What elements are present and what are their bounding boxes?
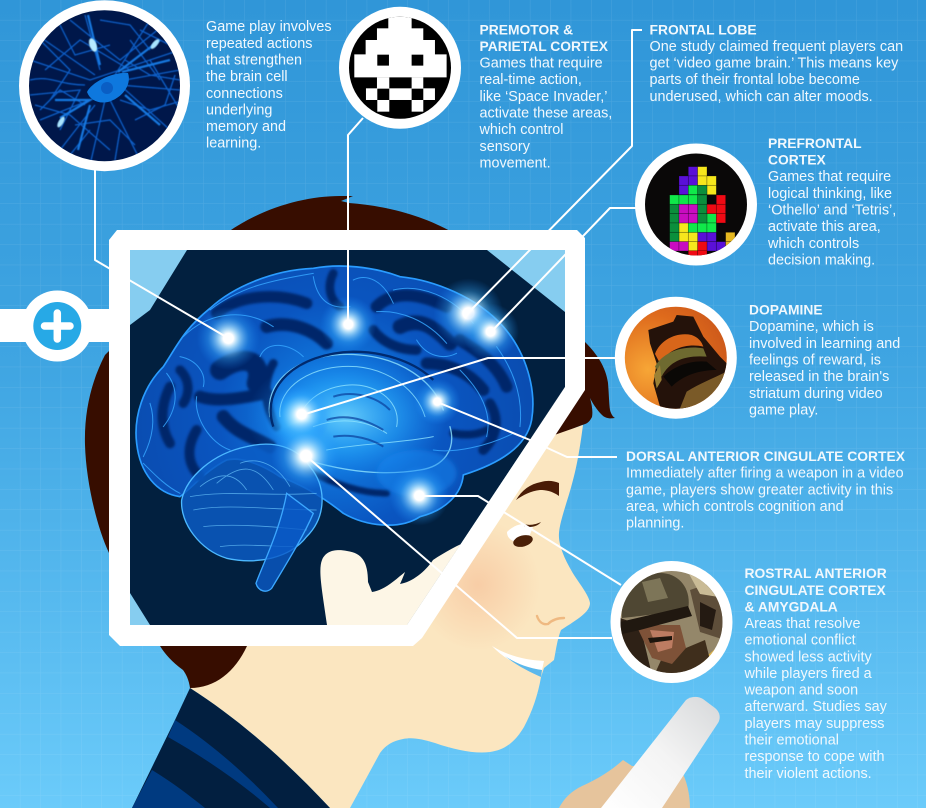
text: rostral anterior cingulate cortex and amygdala [744, 565, 891, 782]
heading: DORSAL ANTERIOR CINGULATE CORTEX [626, 448, 906, 464]
face and neck [190, 425, 590, 808]
text: memory and learning: memory and [206, 119, 286, 135]
body: like ‘Space Invader,’ [480, 89, 607, 105]
body: underused, which can alter moods. [650, 89, 873, 105]
body: which controls [767, 236, 859, 252]
brain [136, 266, 533, 591]
limbic glow [257, 367, 432, 467]
body: afterward. Studies say [744, 699, 888, 715]
heading: PREFRONTAL [768, 135, 862, 151]
hair [85, 196, 615, 688]
body: game play. [749, 402, 818, 418]
circle: neuron [19, 0, 190, 171]
heading: PARIETAL CORTEX [480, 38, 609, 54]
eye [507, 522, 541, 549]
dark striations in limbic system [327, 394, 390, 447]
heading: CORTEX [768, 152, 826, 168]
body: Dopamine, which is [749, 319, 874, 335]
body: real-time action, [480, 72, 582, 88]
mouth [492, 646, 544, 670]
heading: DOPAMINE [749, 302, 823, 318]
text: memory and learning: learning. [206, 136, 261, 152]
body: feelings of reward, is [749, 352, 881, 368]
body: striatum during video [749, 386, 883, 402]
text: memory and learning: the brain cell [206, 69, 288, 85]
body: emotional conflict [744, 632, 856, 648]
body: activate these areas, [480, 106, 612, 122]
window light background [130, 250, 566, 626]
dark sulci [162, 273, 507, 493]
limbic ridges [269, 354, 452, 473]
text: memory and learning: underlying [206, 102, 272, 118]
hand [559, 760, 690, 808]
text: memory and learning: connections [206, 86, 283, 102]
text: dopamine [749, 302, 904, 418]
game controller stick [601, 697, 720, 808]
shirt collar [132, 688, 330, 808]
circle: soldier [610, 561, 732, 683]
brain stem [256, 493, 313, 591]
body: area, which controls cognition and [626, 499, 844, 515]
heading: & AMYGDALA [744, 598, 838, 614]
text: dorsal anterior cingulate cortex [626, 448, 908, 532]
glow points [197, 278, 519, 526]
body: game, players show greater activity in this [626, 482, 893, 498]
body: Games that require [768, 169, 891, 185]
body: movement. [480, 156, 551, 172]
connector lines [95, 30, 642, 638]
text: memory and learning: repeated actions [206, 36, 312, 52]
circle: space invader [339, 7, 461, 129]
body: Areas that resolve [744, 616, 860, 632]
heading: ROSTRAL ANTERIOR [744, 565, 887, 581]
body: while players fired a [744, 666, 872, 682]
white frame [109, 230, 585, 646]
body: their violent actions. [744, 766, 872, 782]
ear and neck [320, 544, 460, 625]
brain window [130, 250, 566, 640]
text: premotor and parietal cortex [478, 22, 616, 172]
body: ‘Othello’ and ‘Tetris’, [768, 202, 896, 218]
nostril [537, 616, 564, 624]
body: showed less activity [744, 650, 872, 666]
body: released in the brain's [749, 369, 889, 385]
body: players may suppress [744, 716, 884, 732]
dark arc in limbic system [271, 352, 433, 427]
body: planning. [626, 516, 684, 532]
body: One study claimed frequent players can [650, 39, 903, 55]
circle: tetris [635, 144, 757, 266]
eyebrow [516, 481, 559, 500]
lower lobe highlight [377, 450, 457, 497]
body: get ‘video game brain.’ This means key [650, 56, 899, 72]
heading: CINGULATE CORTEX [744, 582, 887, 598]
body: decision making. [768, 252, 875, 268]
body: which control [478, 122, 563, 138]
body: response to cope with [744, 749, 884, 765]
body: Immediately after firing a weapon in a video [626, 466, 904, 482]
heading: PREMOTOR & [480, 22, 573, 38]
body: parts of their frontal lobe become [650, 72, 860, 88]
body: involved in learning and [749, 336, 900, 352]
cheek blush [416, 519, 540, 651]
illustration: head in profile [85, 196, 615, 808]
text: frontal lobe [650, 22, 907, 105]
neuron cell body [87, 73, 129, 103]
heading: FRONTAL LOBE [650, 22, 757, 38]
text: memory and learning: Game play involves [206, 19, 332, 35]
body: their emotional [744, 732, 839, 748]
cerebrum [136, 266, 533, 525]
circle: game helmet on orange [615, 297, 737, 419]
body: logical thinking, like [768, 186, 892, 202]
text: memory and learning: that strengthen [206, 52, 302, 68]
mouth shadow line [505, 656, 542, 677]
body: Games that require [480, 56, 603, 72]
light gyri outlines [143, 273, 521, 493]
body: weapon and soon [744, 682, 858, 698]
body: sensory [480, 139, 531, 155]
head silhouette [130, 250, 565, 625]
plus button [0, 290, 109, 362]
text: prefrontal cortex [767, 135, 900, 268]
cerebellum [182, 444, 322, 561]
body: activate this area, [768, 219, 881, 235]
left limbic highlight [268, 399, 306, 442]
